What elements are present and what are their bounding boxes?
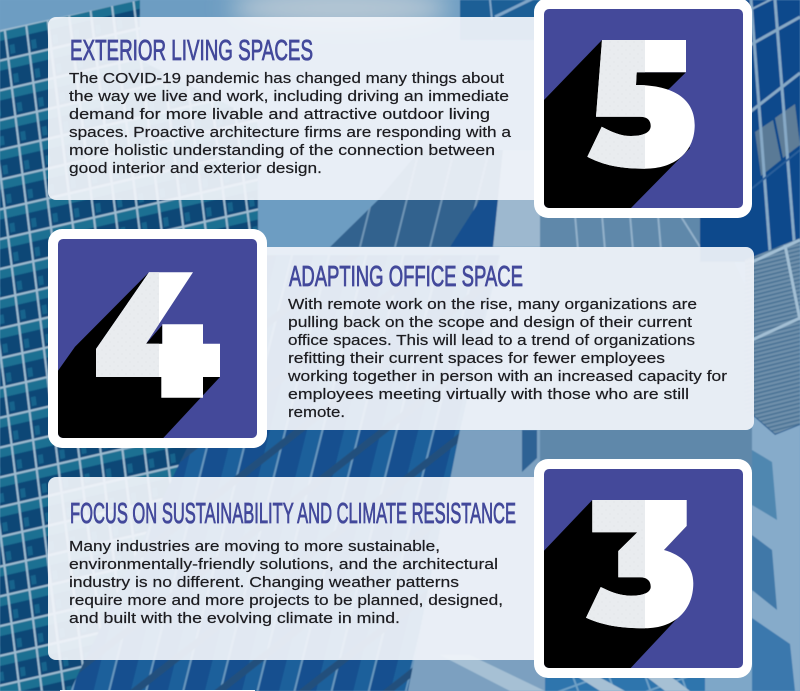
icon: number 3 badge	[534, 459, 752, 678]
text block: exterior living spaces: more holistic understanding of the connection between	[69, 142, 495, 159]
panel: exterior living spaces	[48, 17, 548, 200]
panel: focus on sustainability	[48, 477, 548, 660]
text block: exterior living spaces: The COVID-19 pandemic has changed many things about	[69, 70, 505, 87]
text block: focus on sustainability	[69, 538, 503, 627]
text block: focus on sustainability: require more and more projects to be planned, designed,	[69, 592, 503, 609]
heading: adapting office space: ADAPTING OFFICE SPACE	[289, 261, 523, 293]
text block: focus on sustainability: Many industries are moving to more sustainable,	[69, 538, 440, 555]
text block: exterior living spaces: demand for more livable and attractive outdoor living	[69, 106, 490, 123]
icon: number 5 badge	[534, 0, 752, 218]
panel: adapting office space	[255, 247, 754, 430]
text block: adapting office space: With remote work on the rise, many organizations are	[288, 296, 697, 313]
text block: exterior living spaces: good interior and exterior design.	[69, 160, 322, 177]
heading: exterior living spaces: EXTERIOR LIVING SPACES	[70, 35, 313, 67]
lower right facade	[752, 415, 800, 691]
next badge top edge	[60, 690, 255, 691]
text block: focus on sustainability: industry is no different. Changing weather patterns	[69, 574, 459, 591]
text block: adapting office space: working together in person with an increased capacity for	[287, 368, 727, 385]
text block: adapting office space: pulling back on the scope and design of their current	[288, 314, 693, 331]
text block: adapting office space: employees meeting virtually with those who are still	[288, 386, 689, 403]
top right windows	[700, 0, 800, 262]
text block: focus on sustainability: environmentally-friendly solutions, and the architectural	[69, 556, 498, 573]
text block: focus on sustainability: and built with the evolving climate in mind.	[69, 610, 400, 627]
text block: adapting office space	[287, 296, 727, 421]
text block: adapting office space: office spaces. This will lead to a trend of organizations	[288, 332, 695, 349]
icon: number 4 badge	[48, 229, 267, 448]
text block: adapting office space: refitting their current spaces for fewer employees	[288, 350, 665, 367]
text block: adapting office space: remote.	[288, 404, 345, 421]
text block: exterior living spaces	[69, 70, 512, 177]
louver wall	[745, 238, 800, 435]
text block: exterior living spaces: spaces. Proactive architecture firms are responding with a	[69, 124, 512, 141]
text block: exterior living spaces: the way we live and work, including driving an immediate	[69, 88, 509, 105]
